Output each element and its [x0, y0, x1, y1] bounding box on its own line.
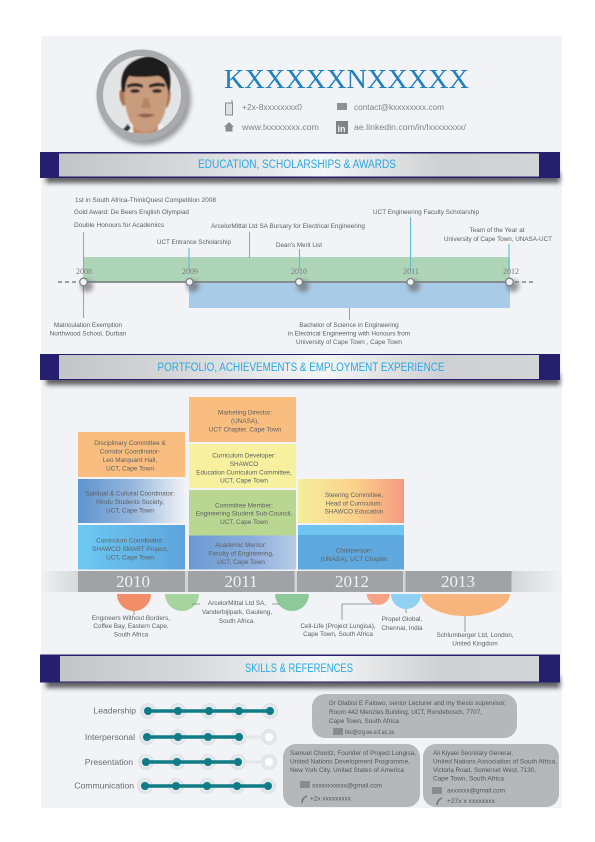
blue bar — [189, 282, 510, 308]
year strip: 2013 — [441, 572, 475, 591]
employer labels: United Kingdom — [452, 640, 498, 648]
column: 2010 roles: UCT, Cape Town — [106, 466, 154, 472]
column: 2011 roles: UCT, Cape Town — [220, 519, 268, 526]
reference card: supervisor: Cape Town, South Africa — [329, 719, 400, 725]
heading: SKILLS & REFERENCES — [245, 663, 353, 675]
column: 2011 roles — [189, 397, 296, 570]
column: 2011 roles: UCT, Cape Town — [220, 478, 268, 484]
award labels: 1st in South Africa-ThinkQuest Competition 2008 — [75, 197, 216, 204]
contact details — [224, 100, 467, 134]
column: 2010 roles — [78, 432, 185, 570]
year labels: 2011 — [403, 267, 419, 276]
column: 2011 roles: Committee Member: — [215, 502, 273, 510]
phone number: +2x-8xxxxxxxx0 — [242, 103, 303, 112]
column: 2011 roles: UCT, Cape Town — [217, 559, 265, 566]
column: 2011 roles: Faculty of Engineering, — [208, 550, 274, 558]
year labels: 2008 — [76, 267, 92, 276]
reference card: secretary general: Ali Kiyaei Secretary General, — [433, 751, 513, 757]
column: 2010 roles: Spiritual & Cultural Coordinator: — [85, 490, 175, 498]
award labels: UCT Entrance Scholarship — [157, 239, 231, 246]
skill: presentation: Presentation — [85, 757, 133, 767]
award labels: Team of the Year at — [469, 227, 525, 234]
reference card: supervisor — [312, 694, 517, 738]
column: 2011 roles: Engineering Student Sub-Council, — [196, 510, 292, 518]
column: 2010 roles: UCT, Cape Town — [106, 508, 154, 514]
award labels — [50, 197, 552, 346]
skill: leadership — [93, 704, 278, 718]
skill: leadership: Leadership — [93, 706, 136, 716]
year labels: 2012 — [503, 267, 519, 276]
reference card: founder: +2x xxxxxxxxx — [310, 796, 351, 802]
column: 2010 roles: Hindu Students Society, — [96, 499, 164, 506]
reference card: founder — [283, 744, 420, 807]
website: www.lxxxxxxxx.com — [241, 123, 319, 132]
employer labels: Cell-Life (Project Lungisa), — [300, 623, 376, 630]
year strip: 2012 — [335, 572, 369, 591]
employer labels: South Africa — [114, 632, 149, 638]
column: 2012 roles — [298, 479, 404, 570]
reference card: secretary general: Victoria Road, Somerset West, 7130, — [433, 768, 536, 774]
award labels: University of Cape Town, UNASA-UCT — [444, 236, 552, 243]
green bar — [83, 257, 510, 282]
year strip: 2010 — [116, 572, 150, 591]
reference card: founder: sxxxxxxxxxx@gmail.com — [312, 784, 382, 790]
section band: education — [40, 152, 560, 183]
section band: skills — [40, 654, 560, 688]
timeline: education — [50, 197, 552, 346]
reference card: secretary general: +27x x xxxxxxxx — [447, 799, 495, 805]
column: 2010 roles: Disciplinary Committee & — [94, 440, 166, 447]
reference card: secretary general: United Nations Association of South Africa, — [433, 760, 557, 766]
employer labels: Cape Town, South Africa — [303, 631, 373, 638]
employer labels — [92, 600, 514, 648]
column: 2011 roles: Academic Mentor: — [215, 542, 267, 549]
employer labels: Vanderbijlpark, Gauteng, — [202, 609, 272, 616]
employers — [92, 594, 514, 648]
column: 2010 roles: Leo Marquard Hall, — [103, 457, 157, 464]
year strip: 2011 — [224, 572, 258, 591]
nodes — [80, 278, 519, 292]
reference card: supervisor: Room 442 Menzies Building, UCT, Rondebosch, 7707, — [329, 710, 482, 716]
column: 2011 roles: Marketing Director: — [218, 410, 272, 416]
award labels: UCT Engineering Faculty Scholarship — [373, 209, 479, 216]
heading: EDUCATION, SCHOLARSHIPS & AWARDS — [198, 159, 396, 171]
reference card: secretary general — [423, 744, 559, 807]
reference card: founder: Samuel Choritz, Founder of Project Lungisa, — [290, 751, 416, 757]
year labels — [76, 267, 519, 276]
column: 2012 roles: Chairperson: — [336, 548, 373, 554]
skill: interpersonal — [85, 730, 276, 744]
column: 2011 roles: UCT Chapter, Cape Town — [209, 426, 282, 434]
icon: linkedin — [336, 121, 348, 134]
column: 2012 roles: Head of Curriculum: — [326, 500, 383, 508]
column: 2010 roles: SHAWCO SMART Project, — [92, 546, 168, 553]
heading: PORTFOLIO, ACHIEVEMENTS & EMPLOYMENT EXPERIENCE — [158, 362, 445, 374]
column: 2011 roles: (UNASA), — [231, 418, 259, 425]
linkedin address: ae.linkedin.com/in/lxxxxxxxx/ — [354, 123, 467, 132]
skill: communication: Communication — [74, 780, 134, 790]
profile photo — [96, 50, 191, 145]
employer labels: Coffee Bay, Eastern Cape, — [93, 623, 169, 630]
skill: interpersonal: Interpersonal — [85, 732, 135, 742]
award labels: Dean's Merit List — [276, 242, 322, 249]
icon: mobile phone — [226, 100, 232, 115]
award labels: Matriculation Exemption — [54, 322, 123, 329]
half circle markers — [117, 594, 510, 616]
award labels: University of Cape Town , Cape Town — [296, 339, 402, 346]
column: 2012 roles: Steering Committee, — [325, 492, 383, 499]
award labels: Gold Award: De Beers English Olympiad — [74, 209, 189, 216]
award labels: Double Honours for Academics — [74, 222, 164, 229]
employer labels: South Africa. — [219, 618, 255, 625]
year strip — [41, 571, 562, 592]
icon: linkedin: in — [338, 124, 346, 134]
column: 2011 roles: Education Curriculum Committee, — [196, 470, 292, 476]
award labels: Bachelor of Science in Engineering — [299, 322, 399, 329]
award labels: ArcelorMittal Ltd SA Bursary for Electrical Engineering — [211, 223, 365, 230]
year labels: 2009 — [182, 267, 198, 276]
employer labels: Engineers Without Borders, — [92, 615, 170, 622]
tick lines — [84, 217, 509, 320]
column: 2010 roles: UCT, Cape Town — [106, 554, 154, 562]
employer labels: Chennai, India — [381, 625, 423, 632]
section band: portfolio — [40, 354, 560, 385]
award labels: in Electrical Engineering with Honours from — [288, 330, 410, 338]
reference card: founder: United Nations Development Programme, — [290, 760, 410, 766]
employer labels: ArcelorMittal Ltd SA, — [208, 600, 266, 607]
reference card: founder: New York City, United States of America — [290, 768, 405, 774]
employer labels: Schlumberger Ltd, London, — [436, 632, 514, 639]
reference card: supervisor: Dr Olabisi E Falowo, senior Lecturer and my thesis supervisor, — [329, 701, 506, 707]
skill: communication — [74, 778, 276, 794]
column: 2012 roles: (UNASA), UCT Chapter — [320, 556, 389, 563]
award labels: Northwood School, Durban — [50, 330, 127, 338]
employer labels: Propel Global, — [382, 616, 422, 623]
column: 2011 roles: Curriculum Developer: — [212, 452, 276, 460]
reference card: supervisor: bisi@crg.ee.uct.ac.za — [345, 730, 395, 736]
connectors — [134, 604, 465, 632]
skill: presentation — [85, 754, 276, 770]
axis — [58, 281, 536, 283]
icon: home — [224, 122, 234, 132]
email address: contact@kxxxxxxxx.com — [354, 103, 444, 112]
column: 2010 roles: Corridor Coordinator- — [100, 448, 160, 456]
reference card: secretary general: axxxxxx@gmail.com — [447, 788, 505, 794]
reference card: secretary general: Cape Town, South Africa — [433, 776, 505, 782]
year labels: 2010 — [291, 267, 307, 276]
column: 2010 roles: Curriculum Coordinator: — [96, 538, 164, 544]
icon: email — [337, 103, 347, 110]
column: 2012 roles: SHAWCO Education — [325, 508, 384, 516]
column: 2011 roles: SHAWCO — [230, 461, 258, 468]
name title: KXXXXXNXXXXX — [224, 64, 470, 94]
